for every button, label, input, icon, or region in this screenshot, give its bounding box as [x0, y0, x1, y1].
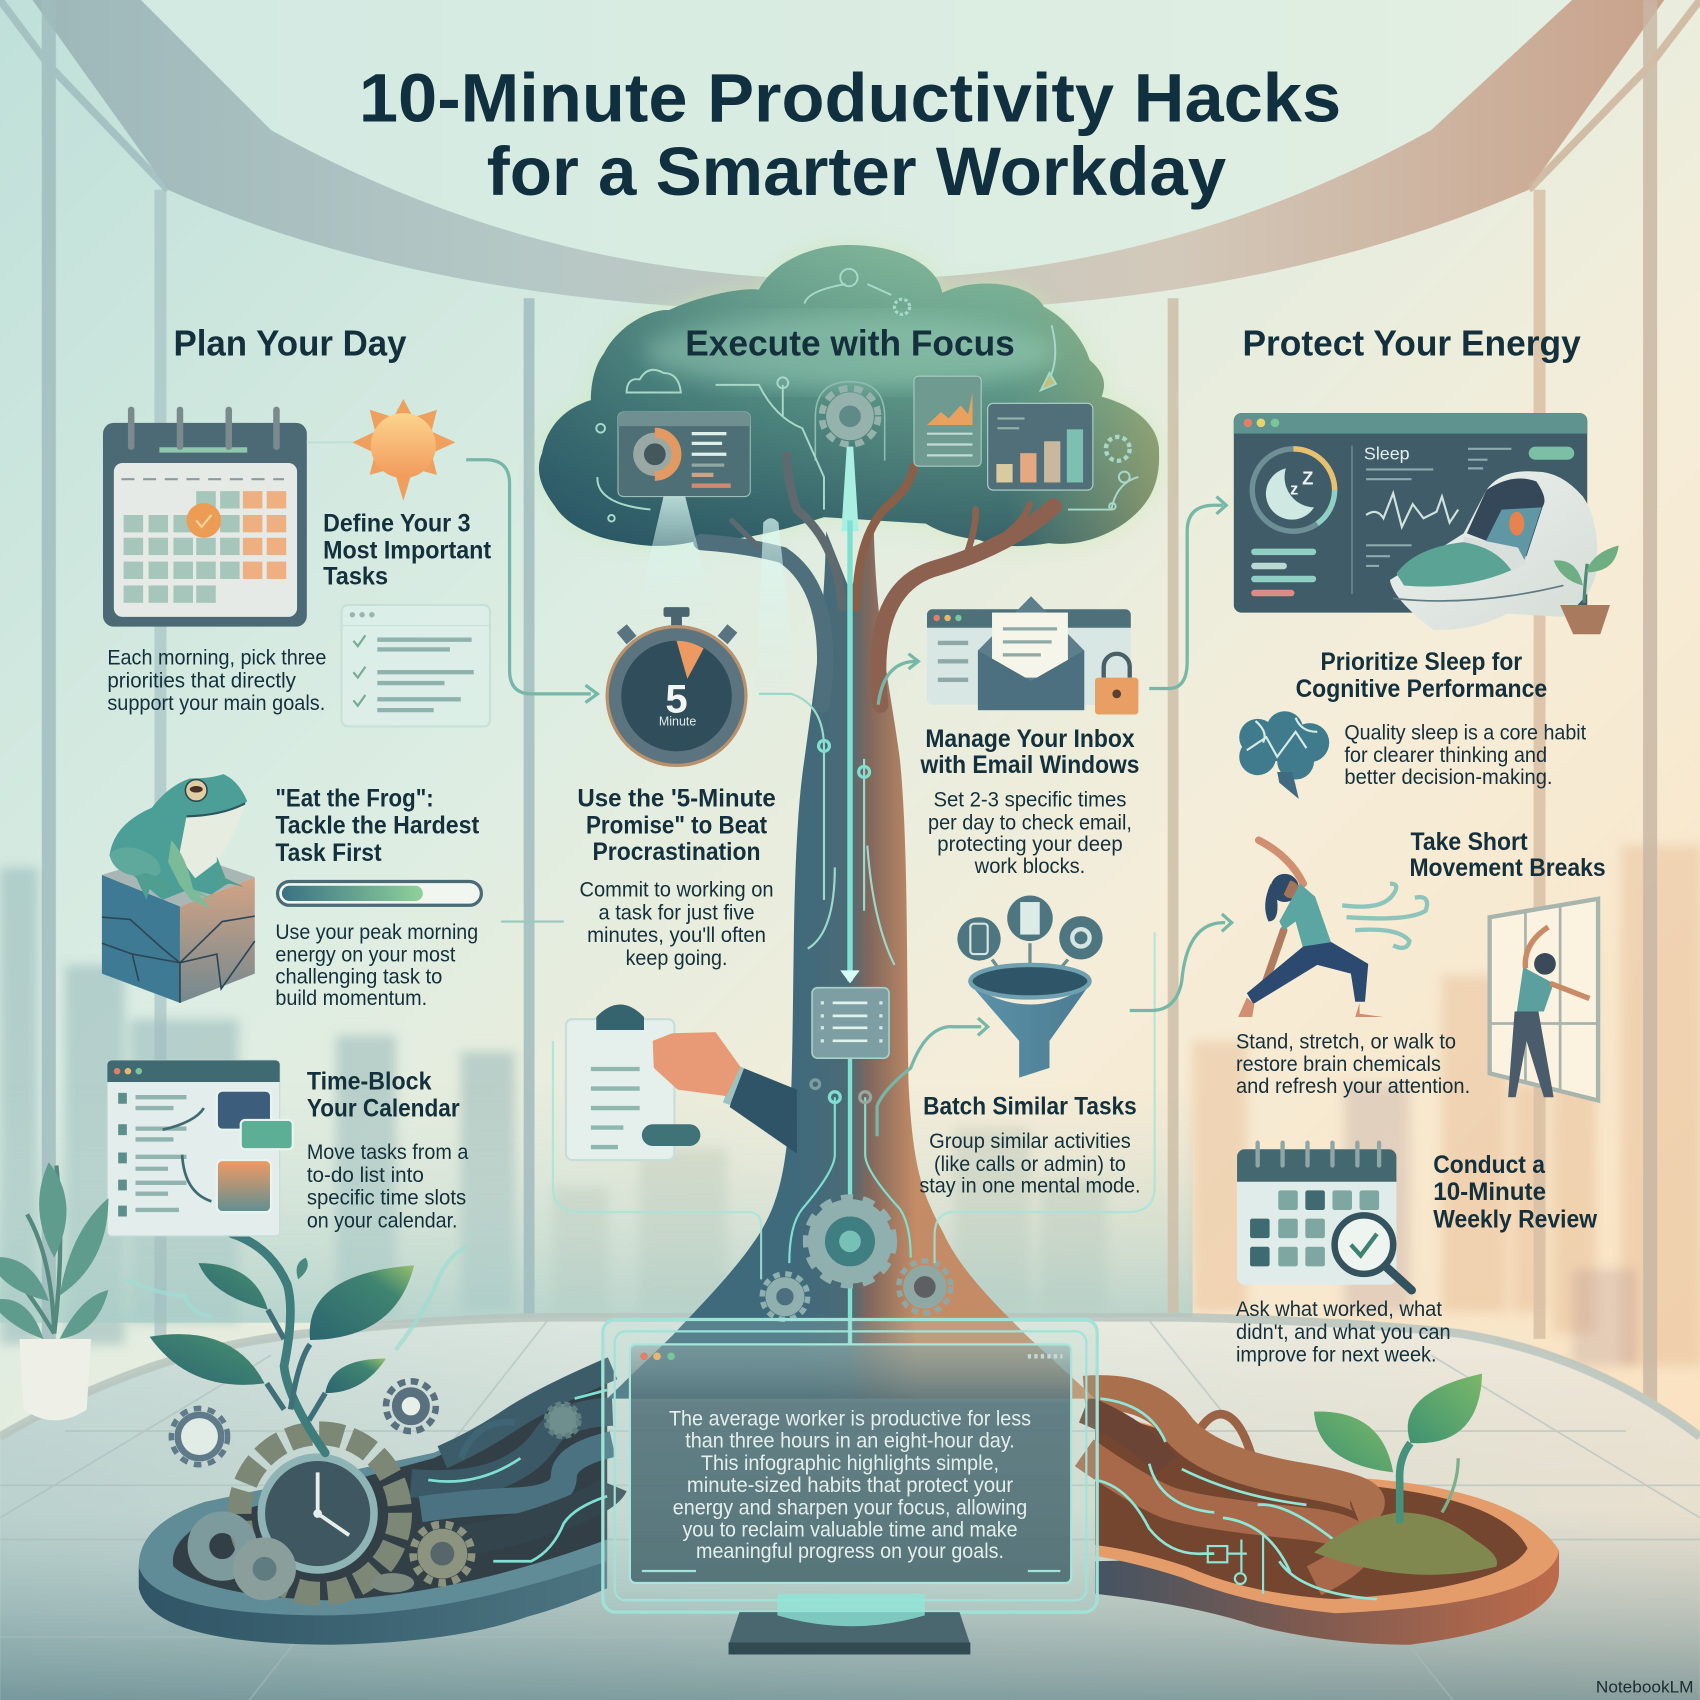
canopy icons	[596, 269, 1138, 531]
icon: checklist window	[342, 605, 490, 726]
icon: wind	[1342, 884, 1427, 948]
icon: brain	[1239, 711, 1329, 799]
text: each morning: Each morning, pick three	[107, 647, 326, 670]
text: batch: stay in one mental mode.	[919, 1175, 1141, 1198]
text: batch: Batch Similar Tasks	[923, 1093, 1137, 1121]
text: peak energy: build momentum.	[275, 987, 427, 1010]
icon: calendar	[103, 410, 307, 627]
canopy circuit lines	[596, 269, 1138, 521]
heading: Protect Your Energy	[1242, 324, 1581, 364]
text: weekly review: Weekly Review	[1433, 1205, 1598, 1233]
arrow: inbox to sleep	[1149, 497, 1226, 688]
column: execute with focus	[566, 324, 1015, 1160]
summary panel	[603, 1319, 1097, 1654]
icon: small plant	[1554, 545, 1619, 634]
text: inbox: with Email Windows	[920, 751, 1139, 779]
arrow: plan to stopwatch	[466, 460, 597, 703]
icon: clipboard with hand	[566, 1004, 797, 1160]
circuit lines	[759, 520, 911, 1344]
text: batch: Group similar activities	[929, 1130, 1131, 1153]
icon: funnel	[957, 896, 1103, 1078]
text: movement heading: Take Short	[1411, 828, 1528, 856]
summary text	[669, 1406, 1031, 1563]
text: stand: restore brain chemicals	[1236, 1053, 1441, 1076]
text: batch: (like calls or admin) to	[934, 1153, 1126, 1176]
icon: review calendar	[1237, 1143, 1412, 1290]
heading: Execute with Focus	[685, 324, 1015, 364]
text: time-block: specific time slots	[307, 1187, 466, 1210]
ceiling	[141, 0, 1572, 280]
icon: sleep dashboard	[1234, 413, 1587, 613]
clock and gears	[171, 1381, 472, 1594]
text: weekly review: improve for next week.	[1236, 1344, 1437, 1367]
title	[359, 60, 1341, 210]
text: quality sleep: for clearer thinking and	[1344, 744, 1547, 767]
summary text: than three hours in an eight-hour day.	[685, 1427, 1015, 1452]
column: protect your energy	[1130, 324, 1619, 1367]
planter: left	[126, 1234, 613, 1645]
monitor stand	[729, 1594, 970, 1654]
text: 5 minute promise: Promise" to Beat	[586, 812, 767, 840]
icon: sleep dashboard: Z	[1302, 468, 1313, 489]
summary text: meaningful progress on your goals.	[696, 1538, 1004, 1563]
summary text: The average worker is productive for less	[669, 1406, 1031, 1431]
text: movement heading: Movement Breaks	[1409, 854, 1606, 882]
text: prioritize sleep: Cognitive Performance	[1296, 675, 1547, 703]
text: define tasks: Tasks	[323, 562, 388, 590]
seedling	[1314, 1374, 1482, 1523]
text: 5 minute promise: Commit to working on	[579, 879, 774, 902]
text: 5 minute promise: Procrastination	[593, 838, 761, 866]
text: time-block: Move tasks from a	[307, 1141, 469, 1164]
icon: sleep dashboard: z	[1290, 480, 1298, 498]
trunk chip	[812, 988, 889, 1058]
sprout with leaves	[150, 1234, 414, 1453]
column: plan your day	[0, 324, 597, 1420]
text: peak energy	[275, 921, 478, 1010]
text: 5 minute promise: Use the '5-Minute	[577, 785, 776, 813]
text: peak energy: Use your peak morning	[275, 921, 478, 944]
text: eat the frog: "Eat the Frog":	[275, 785, 434, 813]
text: quality sleep: better decision-making.	[1344, 766, 1553, 789]
text: peak energy: challenging task to	[275, 965, 442, 988]
trunk gears	[762, 1198, 951, 1319]
bar chart panel	[988, 403, 1093, 490]
text: weekly review	[1236, 1151, 1598, 1367]
text: eat the frog: Task First	[275, 839, 382, 867]
icon: email window	[927, 596, 1138, 714]
text: quality sleep	[1344, 721, 1586, 789]
text: inbox: work blocks.	[974, 855, 1085, 878]
text: weekly review: Conduct a	[1433, 1151, 1546, 1179]
watermark: NotebookLM	[1596, 1677, 1693, 1696]
arrow: to inbox	[878, 654, 918, 705]
text: time-block	[307, 1068, 469, 1232]
text: movement heading	[1409, 828, 1606, 882]
arrow: to funnel	[877, 1018, 988, 1136]
tree branches	[701, 455, 1054, 705]
tree trunk	[607, 531, 1095, 1399]
text: stand	[1236, 1030, 1470, 1098]
icon: sleep dashboard: Sleep	[1364, 444, 1410, 464]
text: time-block: on your calendar.	[307, 1209, 458, 1232]
text: peak energy: energy on your most	[275, 944, 455, 967]
text: stand: Stand, stretch, or walk to	[1236, 1030, 1456, 1053]
icon: potted plant	[0, 1162, 108, 1420]
icon: sun	[307, 399, 455, 501]
text: 5 minute promise: minutes, you'll often	[587, 924, 766, 947]
center gear	[815, 382, 885, 461]
text: prioritize sleep	[1296, 648, 1547, 703]
right roots	[1084, 1392, 1377, 1599]
text: prioritize sleep: Prioritize Sleep for	[1321, 648, 1522, 676]
progress bar	[278, 881, 481, 905]
text: each morning	[107, 647, 326, 715]
text: each morning: priorities that directly	[107, 669, 296, 692]
text: 5 minute promise	[577, 785, 776, 970]
planter: right	[1084, 1374, 1559, 1645]
text: time-block: to-do list into	[307, 1164, 424, 1187]
arrow: movement	[1130, 914, 1232, 1010]
text: inbox: Set 2-3 specific times	[933, 789, 1126, 812]
floor	[0, 1317, 1700, 1700]
soil mound	[1314, 1512, 1497, 1575]
skyline through the windows	[0, 846, 1700, 1366]
icon: sleep pod	[1390, 471, 1597, 630]
central tree	[539, 245, 1159, 1399]
icon: time-block window	[107, 1060, 293, 1236]
text: define tasks: Define Your 3	[323, 509, 471, 537]
text: inbox: protecting your deep	[937, 833, 1123, 856]
text: batch	[919, 1093, 1141, 1198]
heading: Plan Your Day	[173, 324, 407, 364]
text: time-block: Your Calendar	[307, 1095, 460, 1123]
left roots	[411, 1368, 613, 1561]
icon: stopwatch	[607, 607, 746, 765]
column: inbox and batch	[877, 497, 1226, 1198]
area chart panel	[914, 376, 981, 466]
text: inbox	[920, 725, 1139, 878]
text: weekly review: Ask what worked, what	[1236, 1298, 1442, 1321]
text: eat the frog: Tackle the Hardest	[275, 812, 479, 840]
text: weekly review: didn't, and what you can	[1236, 1321, 1451, 1344]
icon: stopwatch: 5	[665, 677, 688, 721]
text: define tasks: Most Important	[323, 536, 491, 564]
text: weekly review: 10-Minute	[1433, 1178, 1546, 1206]
text: 5 minute promise: keep going.	[626, 947, 727, 970]
wisps	[126, 1247, 466, 1350]
title: 10-Minute Productivity Hacks	[359, 60, 1341, 136]
text: inbox: per day to check email,	[928, 811, 1132, 834]
tree canopy	[539, 245, 1159, 546]
text: eat the frog	[275, 785, 479, 867]
icon: window with person	[1490, 899, 1598, 1100]
text: inbox: Manage Your Inbox	[925, 725, 1135, 753]
panel: gear dashboard	[618, 412, 750, 497]
title: for a Smarter Workday	[487, 134, 1226, 210]
text: time-block: Time-Block	[307, 1068, 432, 1096]
text: 5 minute promise: a task for just five	[598, 901, 755, 924]
icon: stopwatch: Minute	[659, 714, 696, 728]
text: define tasks	[323, 509, 491, 590]
light beams	[635, 497, 797, 694]
glow outlines around middle column	[553, 932, 1155, 1279]
icon: frog on rock	[102, 774, 255, 1003]
text: each morning: support your main goals.	[107, 692, 325, 715]
text: stand: and refresh your attention.	[1236, 1075, 1470, 1098]
summary text: This infographic highlights simple,	[701, 1450, 999, 1475]
text: quality sleep: Quality sleep is a core habit	[1344, 721, 1586, 744]
summary text: minute-sized habits that protect your	[687, 1472, 1013, 1497]
summary text: energy and sharpen your focus, allowing	[673, 1495, 1027, 1520]
icon: stretching person	[1238, 840, 1383, 1017]
summary text: you to reclaim valuable time and make	[682, 1516, 1018, 1541]
glowing stem	[841, 447, 859, 531]
